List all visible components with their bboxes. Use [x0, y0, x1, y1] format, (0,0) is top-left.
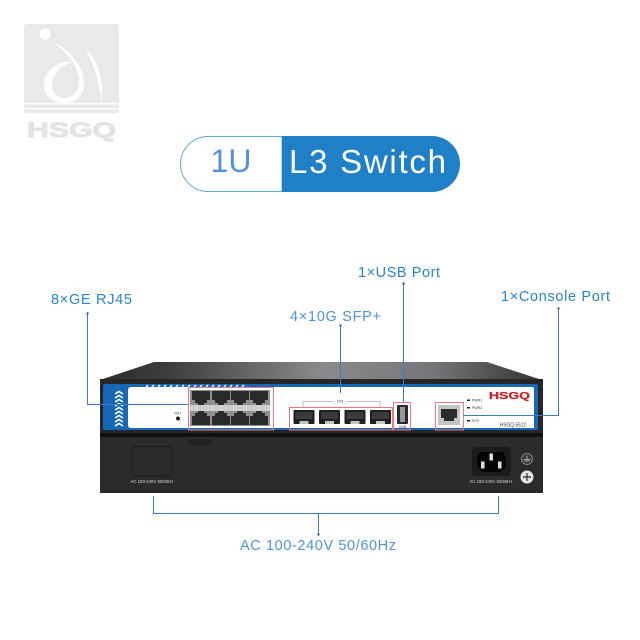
- callout: 1×Console Port: 1×Console Port: [501, 289, 610, 305]
- left power label: AC 100-240V 50/60Hz: [130, 479, 174, 484]
- callout: 4×10G SFP+: 4×10G SFP+: [290, 309, 381, 325]
- USB port: USB: [399, 425, 407, 429]
- status LEDs: SYS: [472, 419, 480, 423]
- switch front panel: [100, 379, 543, 433]
- callout: 4×10G SFP+: [290, 309, 381, 393]
- power socket: [472, 447, 511, 476]
- callout: AC power: [154, 496, 498, 554]
- model number: HSGQ-5512: [500, 422, 526, 428]
- blank module plate: [132, 446, 172, 476]
- title: 1U: 1U: [211, 143, 251, 179]
- ground screw: [520, 470, 534, 484]
- logo wordmark: HSGQ: [27, 119, 116, 142]
- switch top cover: [100, 362, 542, 380]
- status LEDs: [467, 398, 482, 423]
- title: L3 Switch: L3 Switch: [289, 143, 446, 180]
- right power label: AC 100-240V 50/60Hz: [470, 479, 512, 484]
- switch rear panel: [100, 433, 543, 493]
- ground symbol: [522, 454, 532, 464]
- SFP+ port block: 10G: [337, 400, 344, 404]
- logo watermark: [24, 24, 119, 142]
- callout: 8×GE RJ45: 8×GE RJ45: [51, 292, 132, 308]
- title pill: [181, 136, 460, 192]
- status LEDs: PWR2: [472, 406, 482, 410]
- console port: [436, 402, 464, 430]
- white faceplate: [128, 387, 534, 428]
- callout: 1×USB Port: [358, 265, 440, 402]
- brand mark: HSGQ: [489, 391, 530, 402]
- reset button: [174, 412, 182, 420]
- USB port: [394, 402, 410, 430]
- RJ45 port block: [188, 388, 274, 430]
- status LEDs: PWR1: [472, 398, 482, 402]
- rear tab: [188, 439, 212, 446]
- callout: 8×GE RJ45: [51, 292, 188, 404]
- callout: 1×Console Port: [463, 289, 610, 416]
- chevron stack: [115, 392, 123, 426]
- SFP+ port block: [290, 399, 392, 430]
- decorative top stripes: [146, 385, 244, 387]
- callout: AC power: AC 100-240V 50/60Hz: [240, 538, 396, 554]
- callout: 1×USB Port: 1×USB Port: [358, 265, 440, 281]
- reset button: RST: [174, 412, 182, 416]
